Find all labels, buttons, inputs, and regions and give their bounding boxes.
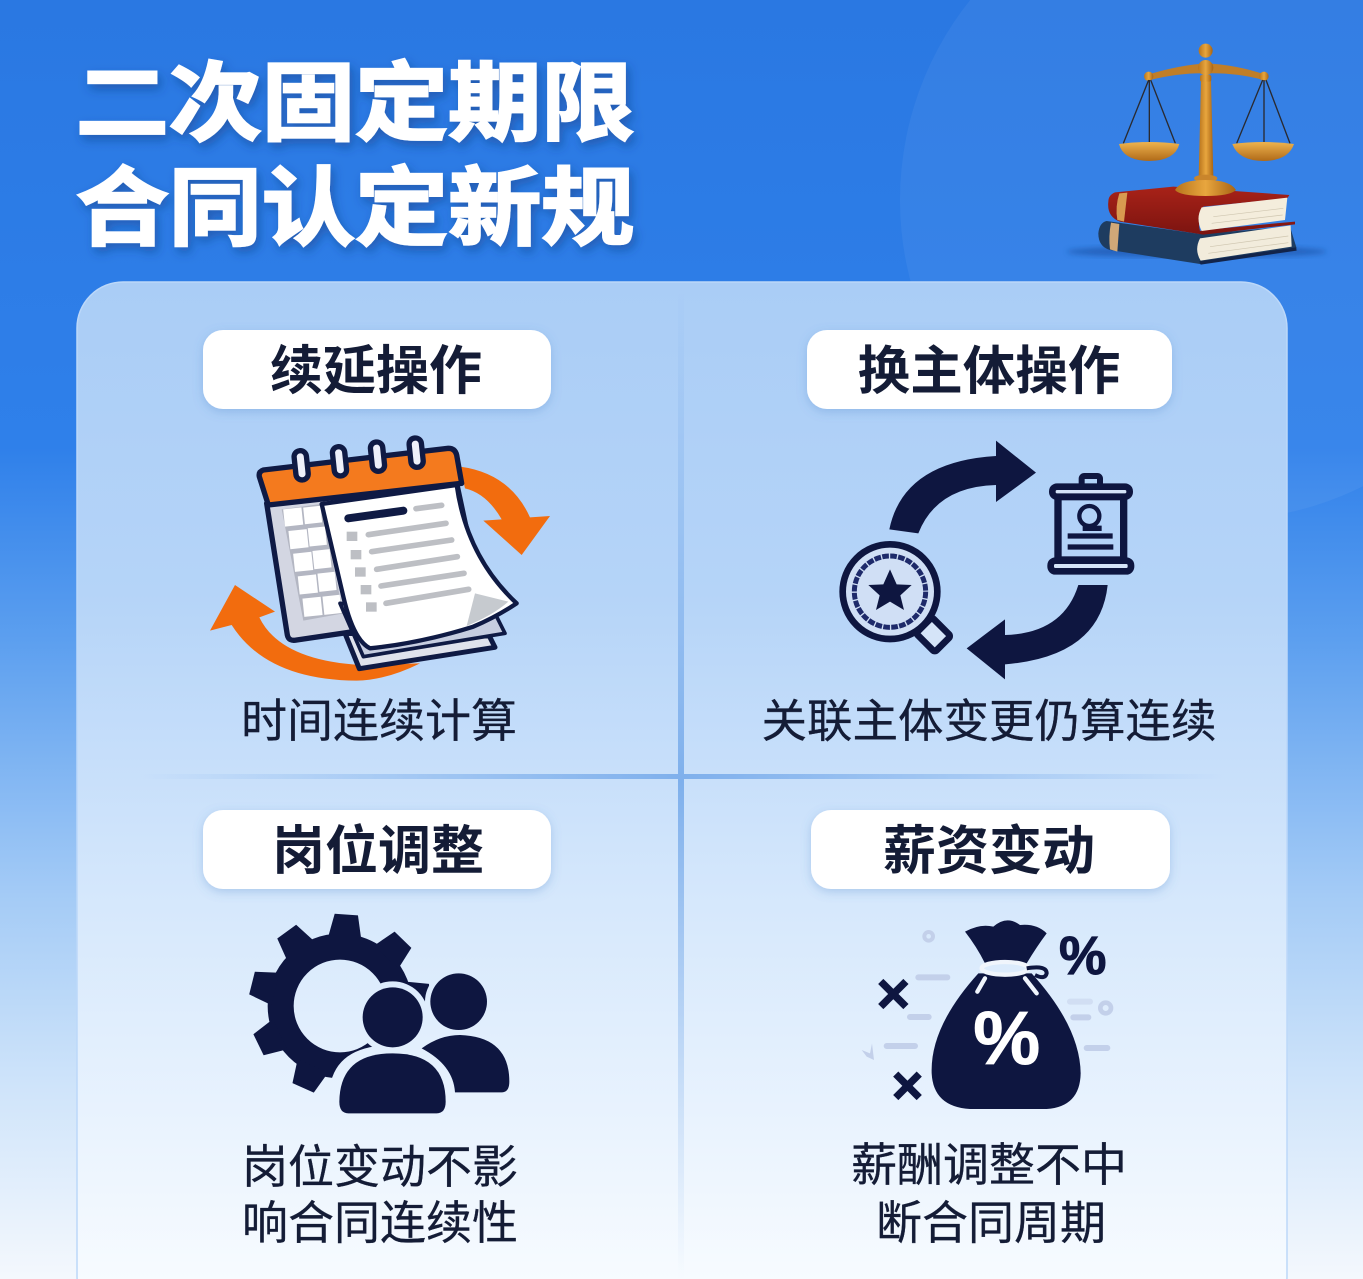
heading pill <box>807 330 1172 409</box>
description <box>851 1139 1127 1249</box>
title <box>76 55 634 256</box>
heading pill: 岗位调整 <box>272 822 484 881</box>
main panel <box>77 282 1287 1279</box>
title: 合同认定新规 <box>76 160 634 256</box>
description: 薪酬调整不中 <box>851 1139 1127 1191</box>
description: 时间连续计算 <box>241 695 517 747</box>
horizontal divider <box>140 774 1225 779</box>
heading pill <box>203 810 551 889</box>
heading pill: 薪资变动 <box>883 822 1095 881</box>
panel: 岗位调整 <box>203 810 551 1249</box>
panel: 续延操作 <box>203 330 551 747</box>
icon: money bag with percent: % <box>973 996 1040 1080</box>
icon: gear and people <box>248 913 509 1113</box>
description: 岗位变动不影 <box>242 1141 518 1193</box>
description <box>242 1141 518 1249</box>
vertical divider <box>678 284 684 1279</box>
heading pill: 续延操作 <box>270 342 482 401</box>
decorative circle top right <box>900 0 1363 520</box>
heading pill <box>203 330 551 409</box>
heading pill: 换主体操作 <box>858 342 1120 401</box>
title: 二次固定期限 <box>76 55 634 151</box>
description: 断合同周期 <box>876 1197 1106 1249</box>
icon: cycle with magnifier and document <box>843 441 1131 679</box>
description: 响合同连续性 <box>242 1197 518 1249</box>
icon: money bag with percent: % <box>1059 927 1106 986</box>
heading pill <box>811 810 1170 889</box>
panel: 换主体操作 <box>761 330 1217 747</box>
icon: calendar with orange arrows <box>210 437 550 681</box>
panel: 薪资变动 <box>811 810 1170 1249</box>
description: 关联主体变更仍算连续 <box>761 696 1217 747</box>
icon: money bag with percent <box>862 920 1111 1109</box>
icon: scales on books <box>1067 44 1327 265</box>
